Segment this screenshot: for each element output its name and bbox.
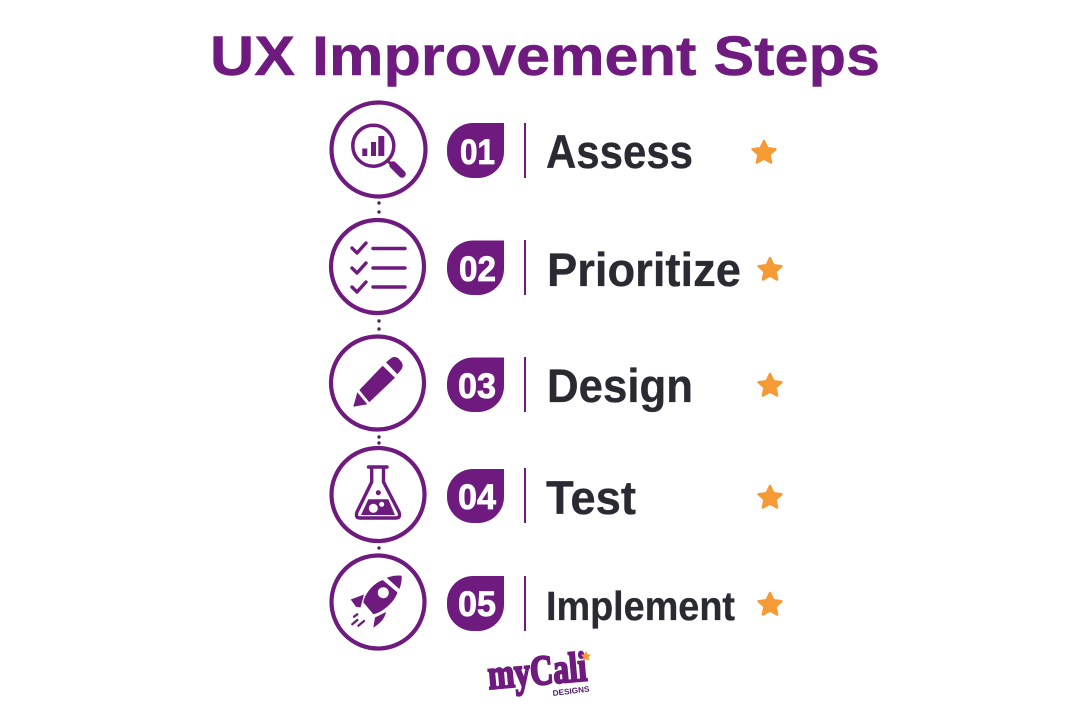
title: UX Improvement Steps	[210, 24, 880, 87]
connector dots	[377, 201, 381, 550]
number badge 05	[447, 576, 504, 631]
number badge 04: 04	[458, 478, 497, 517]
step 1: assess	[332, 102, 775, 196]
icon: magnifier with bar chart	[332, 102, 426, 196]
step 3: design	[331, 336, 781, 430]
icon: star	[759, 374, 781, 396]
label: Prioritize: Prioritize	[547, 243, 741, 296]
label: Design: Design	[547, 359, 693, 412]
icon: star	[759, 593, 781, 614]
label: Test: Test	[546, 471, 636, 524]
label: Implement: Implement	[546, 583, 735, 629]
number badge 01	[447, 123, 504, 178]
number badge 04	[447, 469, 504, 523]
step 2: prioritize	[331, 220, 781, 313]
icon: rocket	[332, 556, 424, 648]
icon: star	[753, 141, 775, 162]
icon: star	[759, 486, 781, 508]
number badge 02	[447, 240, 504, 295]
number badge 05: 05	[458, 585, 496, 624]
step 4: test	[332, 448, 781, 541]
icon: pencil	[331, 336, 424, 430]
label: Assess: Assess	[546, 125, 693, 178]
logo: myCali Designs: myCali	[486, 644, 589, 699]
icon: star	[759, 258, 781, 280]
icon: flask	[332, 448, 424, 541]
logo: myCali Designs: DESIGNS	[552, 684, 591, 698]
step 5: implement	[332, 556, 781, 648]
number badge 02: 02	[459, 250, 496, 289]
icon: checklist	[331, 220, 424, 313]
number badge 03	[447, 358, 504, 412]
number badge 01: 01	[460, 133, 495, 172]
number badge 03: 03	[458, 367, 496, 406]
